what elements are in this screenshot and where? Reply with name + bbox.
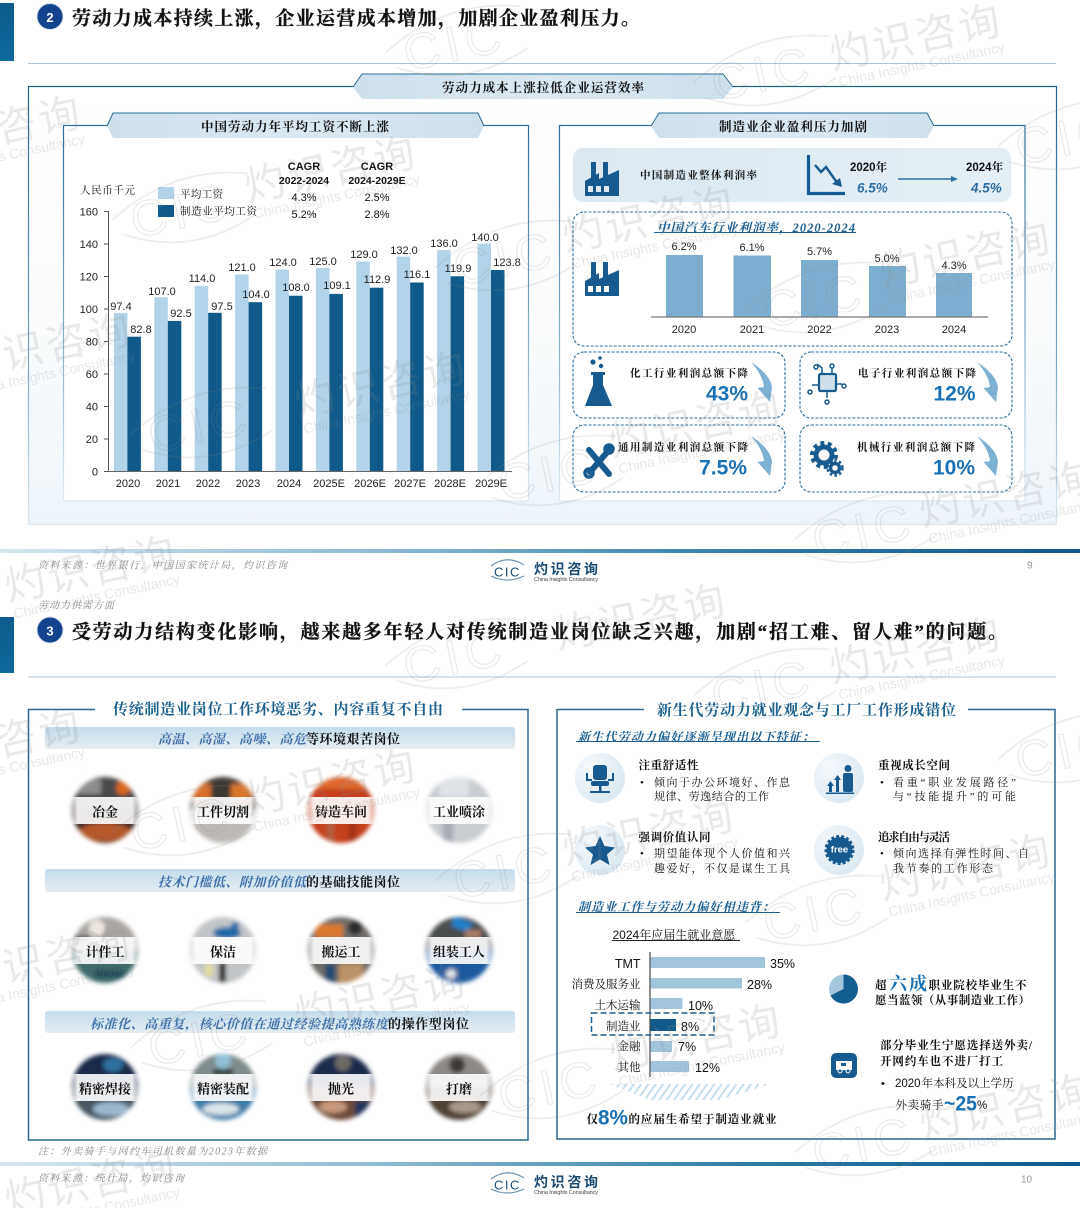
bar chart: wages: 2025E <box>313 478 345 490</box>
trait: comfort: • <box>640 777 644 789</box>
overall profit margin row: 6.5% <box>857 180 888 195</box>
logo page 10: China Insights Consultancy <box>534 1190 598 1196</box>
watermark layer: China Insights Consultancy <box>837 39 1006 90</box>
strip: harsh environment <box>45 727 515 749</box>
watermark layer: China Insights Consultancy <box>617 1039 786 1090</box>
bar chart: graduate preference: 7% <box>678 1040 696 1054</box>
watermark layer: CIC <box>706 649 820 725</box>
watermark layer: 灼识咨询 <box>238 731 422 826</box>
panel: manufacturing profit pressure <box>560 113 1025 501</box>
strip: harsh environment: 等环境艰苦岗位 <box>306 731 400 746</box>
bar chart: wages: 114.0 <box>189 273 215 285</box>
job: piece worker <box>69 915 141 985</box>
auto industry margin chart: 2021 <box>740 324 764 336</box>
watermark layer: 灼识咨询 <box>603 986 787 1081</box>
panel header: wages <box>107 113 484 138</box>
y axis: 120 <box>80 271 98 283</box>
strip: standardised: 的操作型岗位 <box>388 1016 469 1031</box>
icon: flask <box>585 356 612 406</box>
bar chart: graduate preference: TMT <box>615 957 641 971</box>
card: chemical <box>573 352 785 418</box>
trait: freedom: 追求自由与灵活 <box>878 830 950 844</box>
panel header: profit <box>651 113 934 138</box>
arrow <box>898 176 958 182</box>
logo page 9: 灼识咨询 <box>534 561 598 577</box>
icon: delivery <box>831 1053 857 1078</box>
chart unit: 人民币千元 <box>80 183 136 196</box>
job: cleaner: 保洁 <box>210 944 236 959</box>
icon: free badge: free <box>831 844 848 855</box>
logo page 9: China Insights Consultancy <box>534 577 598 583</box>
card: general manufacturing: 通用制造业利润总额下降 <box>618 440 748 453</box>
watermark layer: 灼识咨询 <box>288 333 472 428</box>
watermark layer: 灼识咨询 <box>288 946 472 1041</box>
callout: vocational graduates: 愿当蓝领（从事制造业工作） <box>875 993 1030 1007</box>
card: chemical: 化工行业利润总额下降 <box>630 366 748 379</box>
bar chart: wages: 112.9 <box>364 274 390 286</box>
callout: delivery riders: 部分毕业生宁愿选择送外卖/ <box>880 1038 1033 1052</box>
overall profit margin row <box>573 148 1011 202</box>
trait: comfort: 倾向于办公环境好、作息 <box>654 775 791 789</box>
footer rule page 9 <box>0 549 1080 553</box>
bar chart: graduate preference: 10% <box>688 999 713 1013</box>
bar chart: wages: 82.8 <box>130 324 152 336</box>
watermark layer: CIC <box>807 493 921 569</box>
auto industry margin chart: 4.3% <box>941 260 967 272</box>
job: metallurgy: 冶金 <box>92 804 118 819</box>
chart conclusion: 8% <box>598 1106 628 1129</box>
overall profit margin row: 4.5% <box>970 180 1002 195</box>
source note page 10: 资料来源：统计局，灼识咨询 <box>38 1172 186 1184</box>
arrow: decline <box>751 362 772 402</box>
watermark layer: CIC <box>143 388 257 464</box>
card: machinery <box>800 425 1012 492</box>
auto industry margin chart: 6.1% <box>739 242 765 254</box>
bar chart: wages: 129.0 <box>350 249 378 261</box>
watermark layer: CIC <box>706 36 820 112</box>
job: cutting: 工件切割 <box>197 804 249 819</box>
job: porter: 搬运工 <box>321 944 361 959</box>
callout: delivery riders: 外卖骑手 <box>896 1098 944 1112</box>
chart conclusion: 仅 <box>586 1112 598 1126</box>
strip: standardised <box>45 1011 515 1033</box>
overall profit margin row: 中国制造业整体利润率 <box>640 168 758 181</box>
watermark layer: China Insights Consultancy <box>252 784 421 835</box>
watermark layer: China Insights Consultancy <box>12 571 181 622</box>
strip: low threshold: 技术门槛低、附加价值低 <box>158 874 308 889</box>
footnote: 注：外卖骑手与网约车司机数量为2023年数据 <box>38 1145 269 1157</box>
job: grinding <box>423 1052 495 1122</box>
trait: values: • <box>640 848 644 860</box>
y axis: 60 <box>86 369 98 381</box>
bar chart: wages: 2029E <box>475 478 507 490</box>
section 2 number badge: 2 <box>46 10 54 25</box>
watermark layer: China Insights Consultancy <box>887 256 1056 307</box>
CAGR table <box>279 161 406 221</box>
trait: growth: 重视成长空间 <box>878 758 950 772</box>
callout: delivery riders: % <box>977 1100 987 1112</box>
section 2 accent bar <box>0 3 14 61</box>
chart conclusion: 的应届生希望于制造业就业 <box>628 1112 777 1126</box>
logo page 9: CIC <box>494 564 521 579</box>
bar chart: wages: 124.0 <box>269 257 297 269</box>
trait: freedom: • <box>880 848 884 860</box>
bar chart: wages: 2026E <box>354 478 386 490</box>
icon: falling chart <box>808 155 845 194</box>
page number 10: 10 <box>1021 1174 1033 1185</box>
icon: chip <box>808 364 846 404</box>
bar chart: wages: 92.5 <box>170 308 192 320</box>
auto industry margin chart: 5.0% <box>874 253 900 265</box>
bar chart: graduate preference: 其他 <box>618 1060 641 1074</box>
watermark layer: China Insights Consultancy <box>887 869 1056 920</box>
job: cleaner <box>187 915 259 985</box>
watermark layer: CIC <box>493 1049 607 1125</box>
card: machinery: 机械行业利润总额下降 <box>857 440 976 453</box>
job: precision welding: 精密焊接 <box>79 1081 132 1096</box>
y axis: 100 <box>80 304 98 316</box>
CAGR table: CAGR <box>361 161 393 173</box>
section 2 number badge <box>37 4 63 30</box>
strip: standardised: 标准化、高重复，核心价值在通过经验提高熟练度 <box>90 1016 390 1031</box>
watermark layer: China Insights Consultancy <box>302 999 471 1050</box>
bar chart: wages: 2028E <box>434 478 466 490</box>
bar chart: wages: 2027E <box>394 478 426 490</box>
CAGR table: 2022-2024 <box>279 175 329 187</box>
watermark layer: CIC <box>758 263 872 339</box>
callout: vocational graduates: 超 <box>875 978 887 992</box>
callout: vocational graduates <box>829 974 1030 1007</box>
card: electronics <box>800 352 1012 418</box>
callout: delivery riders <box>831 1038 1033 1115</box>
highlight box: manufacturing <box>592 1013 714 1035</box>
job: spraying: 工业喷涂 <box>433 804 486 819</box>
chart legend <box>158 187 258 217</box>
bar chart: wages <box>108 232 521 490</box>
watermark layer: China Insights Consultancy <box>302 386 471 437</box>
section 3 number badge: 3 <box>46 623 54 638</box>
job: metallurgy <box>69 775 141 845</box>
watermark layer: 灼识咨询 <box>556 168 740 263</box>
auto industry margin chart: 5.7% <box>807 246 832 258</box>
watermark layer: China Insights Consultancy <box>252 171 421 222</box>
bar chart: wages: 136.0 <box>430 238 458 250</box>
icon: wrench and screwdriver <box>585 445 613 477</box>
job: precision welding <box>69 1052 141 1122</box>
section 2 title: 劳动力成本持续上涨，企业运营成本增加，加剧企业盈利压力。 <box>72 6 640 29</box>
watermark layer: 灼识咨询 <box>238 118 422 213</box>
job: spraying <box>423 775 495 845</box>
bar chart: graduate preference: 土木运输 <box>594 998 641 1012</box>
trait: values: 趣爱好，不仅是谋生工具 <box>654 861 791 875</box>
card: electronics: 12% <box>933 382 976 405</box>
chart conclusion <box>586 1106 777 1129</box>
card: general manufacturing <box>573 425 785 492</box>
logo page 10: 灼识咨询 <box>534 1174 598 1190</box>
card: electronics: 电子行业利润总额下降 <box>858 366 976 379</box>
bar chart: wages: 2024 <box>277 478 301 490</box>
watermark layer: CIC <box>125 786 239 862</box>
trait: growth: • <box>880 777 884 789</box>
CAGR table: 5.2% <box>291 209 317 221</box>
panel heading: 传统制造业岗位工作环境恶劣、内容重复不自由 <box>113 700 443 718</box>
arrow: decline <box>977 436 998 476</box>
watermark layer: 灼识咨询 <box>873 203 1057 298</box>
icon: pie chart <box>829 974 858 1004</box>
icon: office chair <box>587 765 613 793</box>
section 3 title: 受劳动力结构变化影响，越来越多年轻人对传统制造业岗位缺乏兴趣，加剧“招工难、留人难”的问题。 <box>72 620 1007 643</box>
callout: delivery riders: 开网约车也不进厂打工 <box>880 1054 1004 1068</box>
y axis: 40 <box>86 401 98 413</box>
trait: values: 强调价值认同 <box>638 830 710 844</box>
arrow: decline <box>977 362 998 402</box>
y axis: 140 <box>80 239 98 251</box>
panel: new generation mismatch <box>557 701 1055 1139</box>
watermark layer: 灼识咨询 <box>556 781 740 876</box>
job: casting: 铸造车间 <box>315 804 367 819</box>
y axis: 160 <box>80 206 98 218</box>
bar chart: wages: 121.0 <box>228 262 256 274</box>
bar chart: wages: 140.0 <box>471 232 499 244</box>
panel: traditional manufacturing jobs <box>28 700 528 1140</box>
logo page 10 <box>491 1173 598 1196</box>
trait: freedom: 倾向选择有弹性时间、自 <box>893 846 1029 860</box>
watermark layer: CIC <box>398 619 512 695</box>
job: grinding: 打磨 <box>446 1081 472 1096</box>
trait: growth <box>814 753 1016 803</box>
job: assembler <box>423 915 495 985</box>
bar chart: wages: 97.4 <box>110 301 132 313</box>
page number 9: 9 <box>1027 560 1033 571</box>
watermark layer: CIC <box>398 6 512 82</box>
trait: values: 期望能体现个人价值和兴 <box>654 846 791 860</box>
auto industry margin chart: 2020 <box>672 324 696 336</box>
panel header: profit: 制造业企业盈利压力加剧 <box>719 119 867 134</box>
subheading: conflict: 制造业工作与劳动力偏好相违背： <box>578 900 774 914</box>
CAGR table: 2024-2029E <box>348 175 406 187</box>
section 3 number badge <box>37 617 63 643</box>
watermark layer: CIC <box>125 173 239 249</box>
panel: labour cost outer frame <box>28 86 1056 524</box>
auto industry margin chart: 2024 <box>942 324 966 336</box>
logo page 9 <box>491 560 598 583</box>
subheading: preferences: 新生代劳动力偏好逐渐呈现出以下特征： <box>578 730 814 744</box>
icon: star <box>585 836 615 865</box>
auto industry margin chart: 中国汽车行业利润率，2020-2024 <box>657 221 855 235</box>
job: polishing <box>305 1052 377 1122</box>
panel header: labour cost: 劳动力成本上涨拉低企业运营效率 <box>442 80 644 95</box>
watermark layer: China Insights Consultancy <box>570 221 739 272</box>
card: general manufacturing: 7.5% <box>699 456 747 479</box>
callout: delivery riders: 2020年本科及以上学历 <box>895 1076 1014 1090</box>
y axis: 20 <box>86 434 98 446</box>
bar chart: wages: 123.8 <box>493 257 521 269</box>
source note page 9: 资料来源：世界银行，中国国家统计局，灼识咨询 <box>38 559 289 571</box>
watermark layer: CIC <box>493 436 607 512</box>
bar chart: graduate preference: 12% <box>695 1061 720 1075</box>
watermark layer: CIC <box>758 876 872 952</box>
auto industry margin chart: 6.2% <box>671 241 697 253</box>
bar chart: graduate preference: 8% <box>681 1020 699 1034</box>
trait: comfort <box>575 753 791 803</box>
card: machinery: 10% <box>933 456 975 479</box>
bar chart: wages: 107.0 <box>148 286 176 298</box>
panel heading: 新生代劳动力就业观念与工厂工作形成错位 <box>657 701 956 719</box>
callout: vocational graduates: 六成 <box>889 974 927 994</box>
strip: low threshold <box>45 869 515 892</box>
bar chart: wages: 2022 <box>196 478 220 490</box>
watermark layer: CIC <box>448 834 562 910</box>
panel: wages chart <box>64 113 528 501</box>
section 3 accent bar <box>0 617 14 673</box>
bar chart: graduate preference: 28% <box>747 978 772 992</box>
watermark layer: CIC <box>807 1106 921 1182</box>
overall profit margin row: 2024年 <box>966 160 1004 174</box>
bar chart: wages: 2020 <box>116 478 140 490</box>
watermark layer: China Insights Consultancy <box>570 834 739 885</box>
hatched projection <box>609 1084 770 1100</box>
job: polishing: 抛光 <box>328 1081 354 1096</box>
callout: delivery riders: • <box>881 1078 885 1090</box>
CAGR table: 2.5% <box>364 192 390 204</box>
bar chart: graduate preference <box>572 927 795 1129</box>
trait: freedom: 我节奏的工作形态 <box>893 861 994 875</box>
bar chart: wages: 97.5 <box>211 301 233 313</box>
card: chemical: 43% <box>706 382 748 405</box>
callout: delivery riders: ~25 <box>944 1092 977 1115</box>
bar chart: graduate preference: 消费及服务业 <box>572 977 641 991</box>
callout: vocational graduates: 职业院校毕业生不 <box>928 978 1027 992</box>
watermark layer: 灼识咨询 <box>603 373 787 468</box>
bar chart: graduate preference: 35% <box>770 957 795 971</box>
logo page 10: CIC <box>494 1177 521 1192</box>
y axis <box>80 206 108 478</box>
bar chart: wages: 119.9 <box>445 263 471 275</box>
CAGR table: 2.8% <box>364 209 390 221</box>
job: precision assembly: 精密装配 <box>197 1081 249 1096</box>
watermark layer: 灼识咨询 <box>823 599 1007 694</box>
job: piece worker: 计件工 <box>85 944 125 959</box>
icon: factory <box>585 162 619 196</box>
chart legend: 制造业平均工资 <box>180 204 258 217</box>
trait: comfort: 注重舒适性 <box>638 758 699 772</box>
trait: comfort: 规律、劳逸结合的工作 <box>654 789 769 803</box>
bar chart: wages: 109.1 <box>323 280 351 292</box>
watermark layer: China Insights Consultancy <box>617 426 786 477</box>
footer rule page 10 <box>0 1162 1080 1166</box>
icon: factory <box>585 262 619 296</box>
watermark layer: China Insights Consultancy <box>837 652 1006 703</box>
icon: growth person <box>826 765 854 794</box>
bar chart: wages: 116.1 <box>404 269 430 281</box>
y axis: 80 <box>86 336 98 348</box>
watermark layer: CIC <box>143 1001 257 1077</box>
trait: growth: 看重“职业发展路径” <box>893 775 1016 789</box>
bar chart: graduate preference: 2024年应届生就业意愿 <box>612 927 735 942</box>
auto industry margin chart: 2023 <box>875 324 899 336</box>
next page tab label: 劳动力供需方面 <box>38 599 116 611</box>
job: porter <box>305 915 377 985</box>
y axis: 0 <box>92 466 98 478</box>
auto industry margin chart <box>573 212 1012 346</box>
chart legend: 平均工资 <box>180 187 224 200</box>
panel header: wages: 中国劳动力年平均工资不断上涨 <box>201 119 389 134</box>
strip: low threshold: 的基础技能岗位 <box>306 874 400 889</box>
bar chart: graduate preference: 制造业 <box>606 1019 641 1033</box>
watermark layer: 灼识咨询 <box>548 566 732 661</box>
icon: free badge <box>826 836 853 864</box>
watermark layer: CIC <box>448 221 562 297</box>
bar chart: wages: 108.0 <box>282 282 310 294</box>
overall profit margin row: 2020年 <box>850 160 888 174</box>
bar chart: wages: 2023 <box>236 478 260 490</box>
job: assembler: 组装工人 <box>433 944 485 959</box>
job: cutting <box>187 775 259 845</box>
watermark layer: 灼识咨询 <box>0 518 182 613</box>
bar chart: wages: 132.0 <box>390 245 418 257</box>
arrow: decline <box>751 436 772 476</box>
strip: harsh environment: 高温、高湿、高噪、高危 <box>158 731 308 746</box>
trait: values <box>575 825 791 875</box>
CAGR table: 4.3% <box>291 192 317 204</box>
trait: freedom <box>814 825 1029 875</box>
watermark layer: 灼识咨询 <box>873 816 1057 911</box>
trait: growth: 与“技能提升”的可能 <box>893 789 1016 803</box>
CAGR table: CAGR <box>288 161 320 173</box>
job: precision assembly <box>187 1052 259 1122</box>
bar chart: graduate preference: 金融 <box>618 1039 641 1053</box>
job: casting <box>305 775 377 845</box>
icon: gears <box>812 443 842 476</box>
bar chart: wages: 104.0 <box>242 289 270 301</box>
auto industry margin chart: 2022 <box>807 324 832 336</box>
bar chart: wages: 125.0 <box>309 256 337 268</box>
panel header: labour cost <box>353 74 733 99</box>
bar chart: wages: 2021 <box>156 478 180 490</box>
